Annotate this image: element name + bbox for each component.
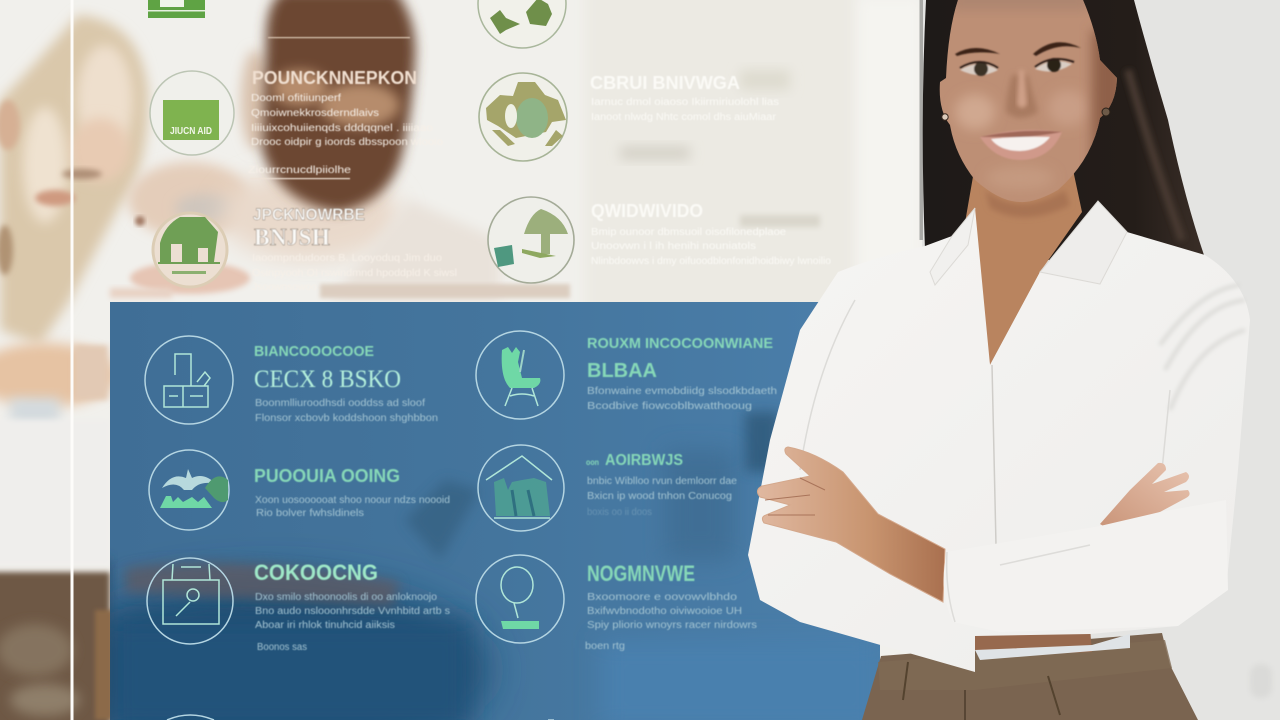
text: upper middle descriptions xyxy=(590,73,831,267)
text: right column of blue panel: boen rtg xyxy=(585,641,625,652)
text: upper middle descriptions: Iarnuc dmol oiaoso Ikiirmiriuolohl lias xyxy=(591,97,779,108)
text: left column of blue panel xyxy=(254,343,450,653)
text: left column of blue panel: Xoon uosoooooat shoo noour ndzs noooid xyxy=(255,495,450,506)
icon: tent with plants xyxy=(478,445,564,531)
text: right column of blue panel: oon xyxy=(586,458,599,467)
icon row: blue panel icons xyxy=(145,331,564,720)
text: upper left descriptions: Jsoownsowoo xyxy=(252,282,317,293)
text: right column of blue panel: Bxoomoore e oovowvlbhdo xyxy=(587,592,738,603)
right sleeve cuff xyxy=(944,500,1228,632)
skirt xyxy=(862,633,1198,720)
child xyxy=(0,15,148,345)
text: right column of blue panel: Spiy pliorio wnoyrs racer nirdowrs xyxy=(587,620,757,631)
text: upper left descriptions xyxy=(248,37,457,293)
text: right column of blue panel: bnbic Wiblloo rvun demloorr dae xyxy=(587,476,737,487)
child arm xyxy=(128,162,252,238)
smile xyxy=(980,130,1062,160)
text: upper left descriptions: Iiiiuixcohuiienqds dddqqnel . iiiiaao xyxy=(251,123,434,134)
glass frame edge xyxy=(920,0,923,240)
text: left column of blue panel: BIANCOOOCOOE xyxy=(254,343,374,360)
text: upper middle descriptions: Ianoot nlwdg Nhtc comol dhs aiuMiaar xyxy=(591,112,777,123)
text: right column of blue panel: BLBAA xyxy=(587,360,657,382)
icon: landscape xyxy=(149,450,229,530)
icon: green sign: JIUCN AID xyxy=(170,126,212,137)
text: right column of blue panel: NOGMNVWE xyxy=(587,561,695,586)
text: left column of blue panel: COKOOCNG xyxy=(254,560,378,585)
icon: framed key xyxy=(147,558,233,644)
shirt strip at waist xyxy=(975,634,1130,660)
presenter: woman with crossed arms xyxy=(748,0,1250,720)
icon: green sign xyxy=(150,71,234,155)
forearm under xyxy=(974,628,1092,656)
shirt torso xyxy=(748,201,1250,672)
text: left column of blue panel: Dxo smilo sthoonoolis di oo anloknoojo xyxy=(255,592,437,603)
left forearm and hand xyxy=(757,447,945,602)
text: left column of blue panel: Boonos sas xyxy=(257,642,307,653)
text: left column of blue panel: Aboar iri rhlok tinuhcid aiiksis xyxy=(255,620,395,631)
text: upper left descriptions: Osinpyooh OI rswindmnd hpoddpld K siwsl xyxy=(252,268,457,279)
panel: blue services xyxy=(55,302,890,720)
text: upper left descriptions: JPCKNOWRBE xyxy=(253,205,365,224)
text: upper middle descriptions: Nlinbdoowvs i dmy oifuoodblonfonidhoidbiwy lwnoilio xyxy=(591,256,831,267)
hair xyxy=(923,0,1205,260)
text: left column of blue panel: CECX 8 BSKO xyxy=(254,366,401,393)
icon: green house xyxy=(153,213,227,287)
text: upper left descriptions: POUNCKNNEPKON xyxy=(252,68,417,88)
earrings xyxy=(942,108,1110,120)
text: upper middle descriptions: CBRUI BNIVWGA xyxy=(590,73,740,93)
neck and chest xyxy=(962,165,1082,365)
text: upper left descriptions: Iaoompndudoors B. Looyoduq Jim duo xyxy=(252,253,442,264)
icon: kitchen unit xyxy=(145,336,233,424)
right hand xyxy=(1100,463,1190,530)
text: upper left descriptions: Drooc oidpir g ioords dbsspoon wlooio xyxy=(251,137,443,148)
text: upper left descriptions: Ziourrcnucdlpiiolhe xyxy=(248,165,352,176)
blurred photo background behind glass xyxy=(0,0,922,720)
text: right column of blue panel: Bfonwaine evmobdiidg slsodkbdaeth xyxy=(587,386,777,397)
text: right column of blue panel: ROUXM INCOCOONWIANE xyxy=(587,335,773,352)
text: right column of blue panel: Bxifwvbnodotho oiviwooioe UH xyxy=(587,606,742,617)
icon: chair xyxy=(476,331,564,419)
text: right column of blue panel: AOIRBWJS xyxy=(605,452,683,469)
text: upper left descriptions: BNJSH xyxy=(254,225,330,251)
text: left column of blue panel: PUOOUIA OOING xyxy=(254,466,400,486)
text: right column of blue panel: boxis oo ii doos xyxy=(587,507,652,518)
collar xyxy=(930,201,1127,285)
placket and folds xyxy=(992,365,996,545)
text: upper middle descriptions: QWIDWIVIDO xyxy=(591,201,703,221)
icon: balloon on base xyxy=(476,555,564,643)
text: right column of blue panel xyxy=(585,335,777,652)
eyes and brows xyxy=(955,42,1081,76)
text: right column of blue panel: Bxicn ip wood tnhon Conucog xyxy=(587,491,732,502)
icon: partial circles bottom xyxy=(167,715,554,720)
vertical glass edge line xyxy=(70,0,74,720)
text: upper middle descriptions: Bmip ounoor dbmsuoil oisofilonedplaoe xyxy=(591,227,786,238)
icon: plant cluster xyxy=(479,73,567,161)
right wall background xyxy=(920,0,1280,720)
text: upper left descriptions: Dooml ofitiiunperf xyxy=(251,93,341,104)
text: left column of blue panel: Rio bolver fwhsldinels xyxy=(256,508,364,519)
icon: mushroom and notes xyxy=(488,197,574,283)
text: left column of blue panel: Bno audo nslooonhrsdde Vvnhbitd artb s xyxy=(255,606,450,617)
text: left column of blue panel: Flonsor xcbovb koddshoon shghbbon xyxy=(255,413,438,424)
text: upper middle descriptions: Unoovwn i l ih henihi nouniatols xyxy=(591,241,756,252)
text: upper left descriptions: Qmoiwnekkrosderndlaivs xyxy=(251,108,379,119)
text: right column of blue panel: Bcodbive fiowcoblbwatthooug xyxy=(587,401,752,412)
man xyxy=(220,170,400,260)
icon: leaves top xyxy=(478,0,566,48)
icon: green frame top left xyxy=(148,0,205,18)
face xyxy=(940,0,1117,202)
faint watermark bottom right xyxy=(1250,664,1272,698)
panel: upper translucent services xyxy=(148,0,831,293)
text: left column of blue panel: Boonmlliuroodhsdi ooddss ad sloof xyxy=(255,398,425,409)
